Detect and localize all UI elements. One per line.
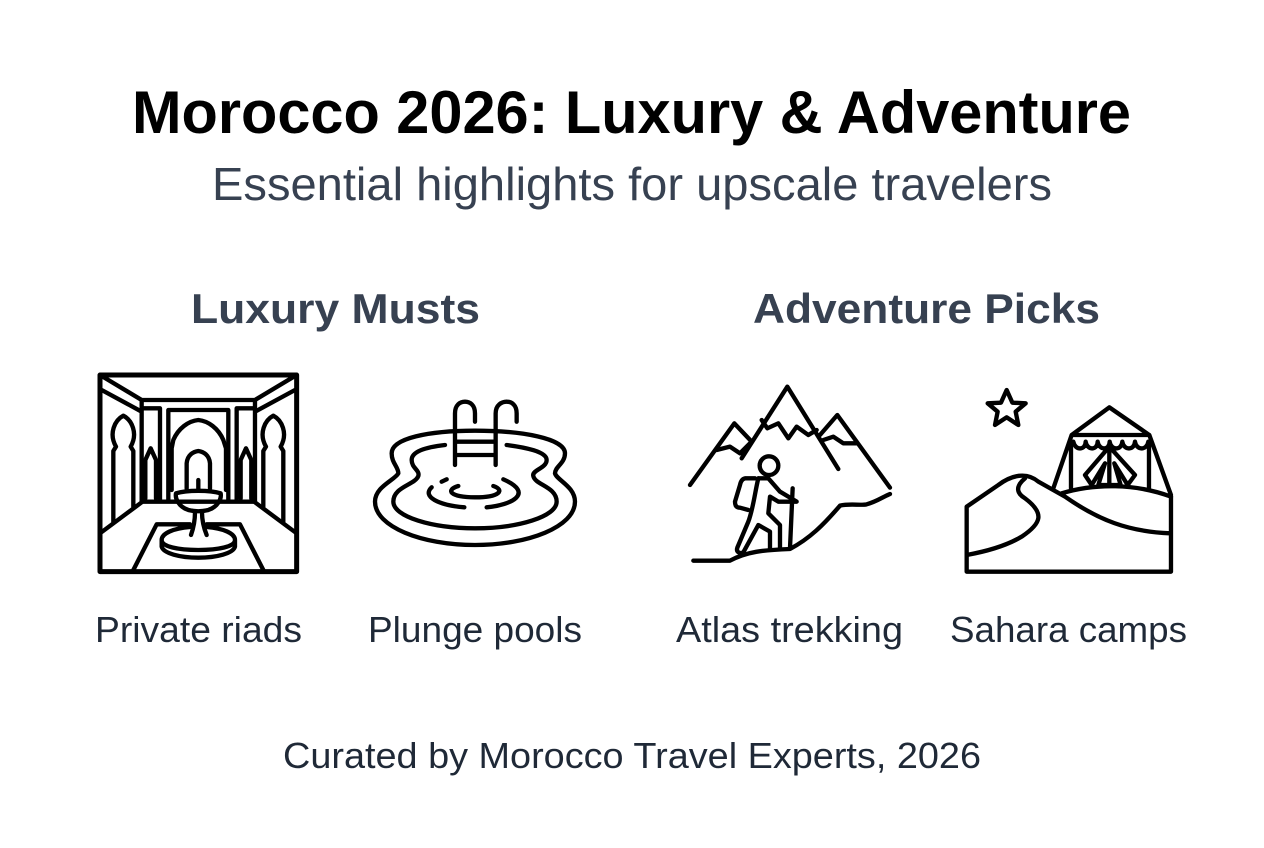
label: Private riads: Private riads xyxy=(95,609,302,650)
footer credit: Curated by Morocco Travel Experts, 2026 xyxy=(283,735,981,776)
subtitle: Essential highlights for upscale travelers xyxy=(212,158,1052,210)
icon: hiker and Atlas mountains xyxy=(690,387,890,561)
heading: Adventure Picks: Adventure Picks xyxy=(753,285,1100,332)
icon: plunge pool with ladder xyxy=(375,402,575,545)
title: Morocco 2026: Luxury & Adventure xyxy=(132,79,1131,146)
label: Atlas trekking: Atlas trekking xyxy=(676,609,903,650)
label: Sahara camps: Sahara camps xyxy=(950,609,1187,650)
icon: riad courtyard with fountain xyxy=(100,375,297,572)
heading: Luxury Musts: Luxury Musts xyxy=(191,285,480,332)
icon: Sahara dune camp with star xyxy=(967,390,1171,572)
label: Plunge pools: Plunge pools xyxy=(368,609,582,650)
